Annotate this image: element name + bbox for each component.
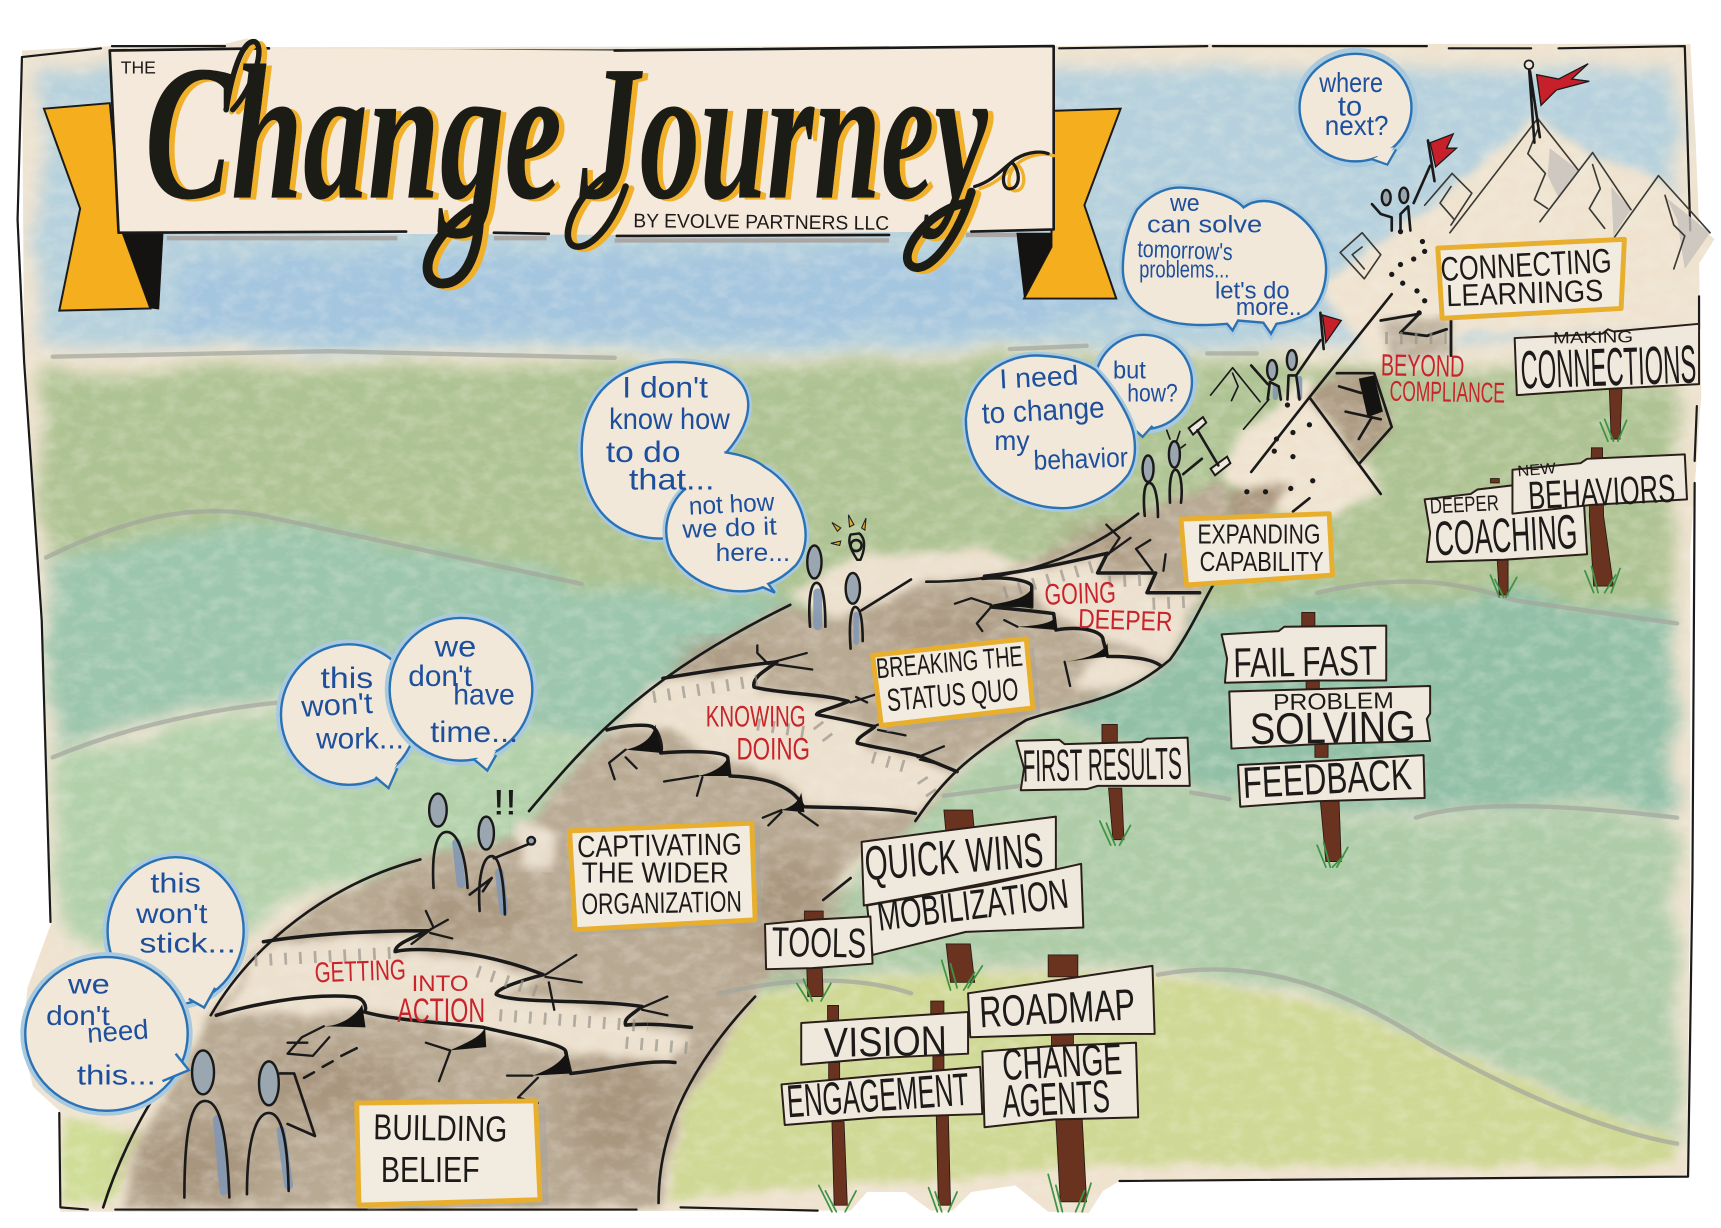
figures: two people at start bbox=[184, 1048, 357, 1197]
red stage labels bbox=[314, 347, 1505, 1030]
bubble: but how: but bbox=[1113, 357, 1146, 385]
red stage labels: GOING bbox=[1044, 576, 1116, 612]
box: Captivating the wider organization bbox=[570, 823, 762, 935]
bubble: we don't need this: this... bbox=[77, 1059, 156, 1090]
bubble: I need to change my behavior bbox=[966, 355, 1135, 508]
box: Captivating the wider organization: CAPTIVATING bbox=[577, 826, 742, 864]
icon: lightbulb bbox=[831, 515, 866, 560]
figures: two people with idea bbox=[807, 515, 911, 649]
bubble text: I don't know how to do that: I don't bbox=[622, 371, 709, 404]
bubble: we can solve tomorrow's problems: can solve bbox=[1147, 212, 1262, 239]
sign: Roadmap bbox=[968, 966, 1155, 1037]
sign: Tools: TOOLS bbox=[771, 918, 867, 967]
title: Change Journey script: Journey bbox=[579, 26, 989, 240]
box: Building Belief bbox=[357, 1101, 549, 1210]
icon: dumbbell bbox=[1167, 417, 1230, 475]
bubble: we don't need this: we bbox=[67, 968, 110, 999]
box: Breaking the status quo bbox=[873, 639, 1041, 732]
text: exclamation marks: !! bbox=[493, 783, 517, 822]
bubble: not how we do it here: not how bbox=[688, 488, 776, 521]
sign: Tools bbox=[765, 916, 873, 969]
bubble: where to next: where bbox=[1318, 67, 1383, 98]
bubble: I need to change my behavior: I need bbox=[999, 359, 1079, 395]
sign: Problem Solving: SOLVING bbox=[1249, 702, 1416, 754]
bubble: this won't stick bbox=[106, 856, 245, 1008]
ribbon left bbox=[44, 103, 164, 311]
dotted trail lower bbox=[1244, 402, 1315, 494]
wooden signs: FIRST RESULTS bbox=[1022, 738, 1182, 791]
bubble: not how we do it here: here... bbox=[716, 539, 790, 567]
landscape hill lines bbox=[46, 346, 1677, 1144]
sign: Change Agents: AGENTS bbox=[1001, 1070, 1111, 1127]
bubble text: this won't work bbox=[299, 662, 404, 756]
sign: Vision: VISION bbox=[824, 1017, 947, 1066]
bubble text: I don't know how to do that: know how bbox=[609, 403, 730, 436]
red stage labels: DOING bbox=[736, 731, 810, 767]
red stage labels: COMPLIANCE bbox=[1389, 376, 1505, 410]
cliff with terraces bbox=[1251, 294, 1451, 494]
sign: Deeper Coaching bbox=[1425, 483, 1587, 566]
red stage labels: KNOWING bbox=[706, 701, 806, 734]
sign: New Behaviors: NEW bbox=[1517, 460, 1557, 480]
box: Expanding capability: EXPANDING bbox=[1197, 518, 1320, 549]
sign: Fail Fast bbox=[1222, 626, 1386, 686]
icon: summit red flag bbox=[1525, 60, 1589, 143]
bubble: we can solve tomorrow's problems: let's do bbox=[1215, 278, 1290, 305]
bubble: not how we do it here bbox=[666, 452, 806, 593]
bubble text: this won't work: won't bbox=[299, 687, 374, 724]
sign: Engagement bbox=[781, 1063, 982, 1127]
bubble text: I don't know how to do that: to do bbox=[606, 436, 680, 469]
bubble: we don't have time: have bbox=[453, 679, 515, 712]
bubble: not how we do it here: we do it bbox=[681, 513, 777, 544]
bubble: I need to change my behavior: my bbox=[994, 425, 1030, 456]
box: Connecting learnings bbox=[1438, 239, 1624, 318]
red stage labels: GETTING bbox=[314, 954, 406, 989]
icon: climbers with flag bbox=[1372, 134, 1456, 231]
bubble text: this won't stick: won't bbox=[135, 898, 208, 929]
title banner bbox=[110, 26, 1054, 284]
bubble: we don't need this: need bbox=[86, 1013, 150, 1049]
box: Breaking the status quo: STATUS QUO bbox=[885, 671, 1020, 718]
road outlines and terraces bbox=[103, 514, 1218, 1207]
sign: New Behaviors bbox=[1512, 454, 1687, 518]
sign: Mobilization: MOBILIZATION bbox=[875, 870, 1071, 940]
title: Change Journey script: Change bbox=[145, 26, 562, 240]
bubble: but how: how? bbox=[1127, 380, 1178, 408]
sign: First Results bbox=[1016, 738, 1190, 791]
bubble: where to next: to bbox=[1338, 90, 1362, 121]
figures: two people captivating bbox=[429, 783, 535, 914]
bubble: I need to change my behavior: to change bbox=[981, 391, 1105, 431]
box: Building Belief: BELIEF bbox=[381, 1149, 480, 1190]
bubble text: this won't stick bbox=[135, 867, 236, 959]
box: Building Belief: BUILDING bbox=[373, 1106, 508, 1150]
bubble: we don't have time: don't bbox=[408, 660, 473, 693]
title: Change Journey script bbox=[145, 26, 1048, 284]
ribbon right bbox=[1016, 109, 1121, 299]
box: Captivating the wider organization: THE WIDER bbox=[582, 857, 729, 889]
red stage labels: ACTION bbox=[397, 992, 485, 1030]
bubble: we don't need this: don't bbox=[46, 1000, 110, 1031]
title: byline: BY EVOLVE PARTNERS LLC bbox=[633, 210, 889, 235]
bubble text: I don't know how to do that: that... bbox=[629, 464, 715, 497]
red stage labels: BEYOND bbox=[1381, 347, 1465, 384]
title: small The: THE bbox=[121, 58, 156, 78]
bubble: we can solve tomorrow's problems: tomorrow's bbox=[1137, 236, 1233, 266]
figures: two people with dumbbell bbox=[1143, 417, 1230, 517]
red stage labels: INTO bbox=[412, 971, 469, 996]
sign: Deeper Coaching: DEEPER bbox=[1429, 490, 1499, 519]
sign: Mobilization bbox=[867, 864, 1083, 955]
bubble: but how bbox=[1094, 334, 1193, 437]
bubble: where to next: next? bbox=[1325, 110, 1388, 141]
bubble text: this won't work: this bbox=[320, 662, 373, 695]
bubble: I don't know outline bbox=[582, 362, 748, 539]
dotted trail upper bbox=[1389, 229, 1427, 315]
bubble: we don't have time: we bbox=[434, 630, 476, 663]
bubble: I need to change my behavior: behavior bbox=[1033, 441, 1128, 476]
sign: Engagement: ENGAGEMENT bbox=[785, 1063, 971, 1127]
box: Connecting learnings: LEARNINGS bbox=[1446, 273, 1604, 313]
box: Captivating the wider organization: ORGANIZATION bbox=[581, 886, 742, 921]
bubble: we can solve tomorrow's problems: more.. bbox=[1236, 294, 1302, 321]
bubble: where to next bbox=[1297, 52, 1414, 165]
box: Breaking the status quo: BREAKING THE bbox=[875, 641, 1024, 685]
signpost posts with grass bbox=[797, 382, 1627, 1212]
bubble text: I don't know how to do that bbox=[606, 371, 730, 497]
bubble: we can solve tomorrow's problems: we bbox=[1169, 190, 1200, 217]
sign: Feedback: FEEDBACK bbox=[1242, 750, 1413, 808]
bubble: we don't have time: time... bbox=[430, 716, 518, 749]
sign: Problem Solving bbox=[1229, 686, 1430, 754]
bubble: this won't work outline bbox=[280, 643, 418, 788]
sign: Making Connections: MAKING bbox=[1553, 328, 1633, 348]
bubble: we don't have time bbox=[389, 617, 533, 771]
sign: Problem Solving: PROBLEM bbox=[1273, 687, 1394, 715]
orange milestone boxes bbox=[357, 239, 1624, 1210]
bubble text: this won't stick: this bbox=[150, 867, 201, 898]
sign: Quick Wins: QUICK WINS bbox=[863, 823, 1045, 891]
sign: Roadmap: ROADMAP bbox=[978, 980, 1136, 1037]
mountains and summit bbox=[1211, 60, 1710, 511]
sign: Fail Fast: FAIL FAST bbox=[1233, 637, 1378, 686]
box: Expanding capability: CAPABILITY bbox=[1200, 546, 1324, 577]
bubble: we don't need this bbox=[24, 956, 189, 1112]
box: Expanding capability bbox=[1181, 514, 1332, 585]
red stage labels: DEEPER bbox=[1078, 603, 1173, 637]
bubble text: this won't work: work... bbox=[315, 723, 404, 756]
bubble text: this won't stick: stick... bbox=[139, 928, 236, 959]
wooden signs bbox=[765, 324, 1699, 1127]
box: Connecting learnings: CONNECTING bbox=[1440, 242, 1613, 289]
bubble: we can solve tomorrow's problems: problems... bbox=[1139, 257, 1229, 284]
icon: second peak with climbers bbox=[1211, 313, 1341, 429]
bubble: we can solve tomorrow's problems bbox=[1123, 188, 1326, 334]
sign: Deeper Coaching: COACHING bbox=[1433, 505, 1579, 566]
sign: Quick Wins bbox=[862, 817, 1056, 906]
sign: Change Agents: CHANGE bbox=[1001, 1035, 1123, 1090]
speech bubbles bbox=[24, 52, 1414, 1112]
sign: Change Agents bbox=[982, 1035, 1138, 1127]
